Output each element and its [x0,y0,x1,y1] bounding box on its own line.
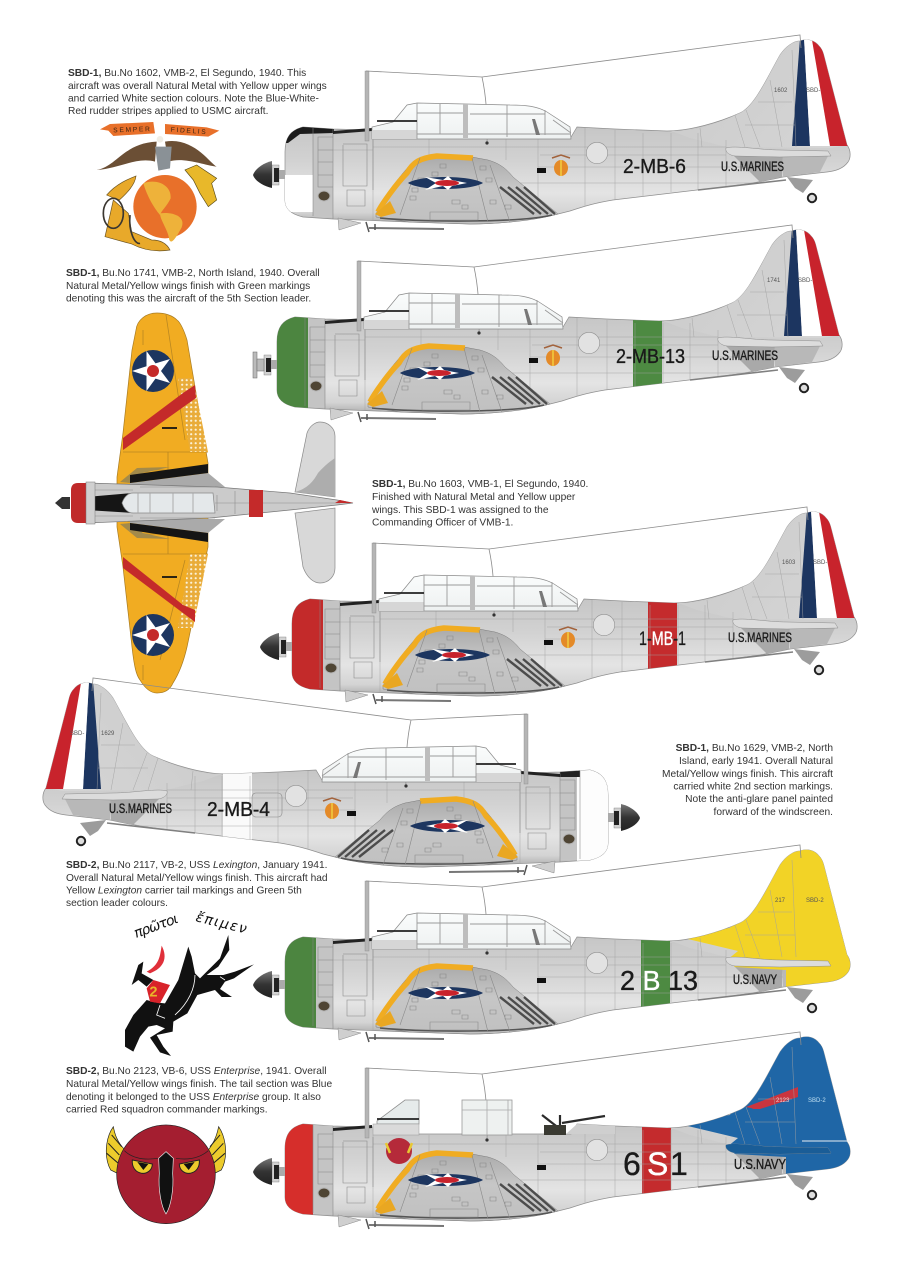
emblem: USMC eagle, globe and anchor: FIDELIS [171,127,206,136]
plan view aircraft: yellow wings [55,313,353,693]
pegasus silhouette: 2 [149,985,157,1001]
canopy [372,103,571,139]
fuselage and tail [285,40,850,224]
fin serials [70,731,115,737]
fin serials: SBD- [813,560,827,566]
text block: SBD-2 Bu.No 2123: denoting it belonged to the USS Enterprise group. It also [66,1092,321,1103]
fin serials [767,278,812,284]
U.S. MARINES: U.S.MARINES [721,159,784,174]
motto: πρῶτοι [132,911,181,942]
fuselage panel lines [95,487,340,518]
tailplane [295,422,335,583]
fin serials [782,560,827,566]
perforated flaps [178,378,208,628]
fuselage [87,483,353,523]
USMC decal [552,155,570,176]
text block: SBD-1 Bu.No 1603: wings. This SBD-1 was assigned to the [371,505,549,516]
code 2B13: 2 B 13 [620,965,698,996]
text block: SBD-1 Bu.No 1603: Finished with Natural Metal and Yellow upper [372,492,576,503]
airframe [253,225,842,422]
emblem: USMC eagle, globe and anchor [97,122,219,251]
airframe mirrored [43,678,640,875]
fin serials [775,898,824,904]
aircraft profile: 2-MB-6 [253,35,850,232]
yellow wings [106,1127,226,1175]
black walkways [130,464,208,542]
motto [132,909,249,942]
text block: SBD-2 Bu.No 2123: Natural Metal/Yellow wings finish. The tail section was Blue [66,1079,332,1090]
text block: SBD-1 Bu.No 1741: SBD-1, Bu.No 1741, VMB-2, North Island, 1940. Overall [66,268,320,279]
text block: SBD-1 Bu.No 1602: Red rudder stripes applied to USMC aircraft. [68,106,268,117]
wing dashes [162,428,177,577]
text block: SBD-2 Bu.No 2117: Yellow Lexington carrier tail markings and Green 5th [66,886,302,896]
US MARINES: U.S.MARINES [728,630,792,645]
US MARINES: U.S.MARINES [109,801,172,816]
motto: ἔπιμεν [194,909,249,938]
fin serials: SBD-2 [806,898,824,904]
pegasus silhouette [125,935,254,1056]
text block: SBD-1 Bu.No 1629: carried white 2nd section markings. [673,782,833,792]
red wing stripes [123,385,196,622]
fin serials [774,88,820,94]
code 6 S 1: S [647,1146,668,1182]
fin serials: 1602 [774,88,788,94]
code 1-MB-1: 1-MB-1 [639,629,686,650]
text block: SBD-1 Bu.No 1603: Commanding Officer of VMB-1. [372,518,513,528]
text block: SBD-1 Bu.No 1629: Note the anti-glare panel painted [685,794,833,805]
fin serials: SBD- [798,278,812,284]
code 6 S 1: 6 [623,1146,641,1182]
fin serials: 1603 [782,560,796,566]
text block: SBD-1 Bu.No 1629: SBD-1, Bu.No 1629, VMB-2, North [676,743,833,754]
canopy frames [138,493,193,513]
fuselage red band [249,490,263,517]
text block: SBD-1 Bu.No 1629: Island, early 1941. Overall Natural [679,756,833,767]
text block: SBD-1 Bu.No 1602: aircraft was overall Natural Metal with Yellow upper wings [68,81,327,92]
text block: SBD-2 Bu.No 2117: SBD-2, Bu.No 2117, VB-2, USS Lexington, January 1941. [66,860,327,871]
fin serials: SBD- [806,88,820,94]
text block: SBD-1 Bu.No 1741: denoting this was the aircraft of the 5th Section leader. [66,294,311,304]
wing feathers [107,1135,225,1163]
code 2-MB-6: 2-MB-6 [623,156,686,178]
code 2-MB-4: 2-MB-4 [207,799,270,821]
code 6 S 1: 1 [670,1146,688,1182]
white cowling patch and anti-glare [285,125,334,212]
upper wing roundel [132,350,174,392]
text block: SBD-2 Bu.No 2123: SBD-2, Bu.No 2123, VB-6, USS Enterprise, 1941. Overall [66,1066,326,1077]
aircraft profile: 2-MB-13 [253,225,842,422]
pupils [137,1162,195,1170]
lower wing roundel [132,614,174,656]
wing panel lines [123,315,208,680]
rudder stripes [792,38,848,146]
aircraft profile: 2B13 yellow tail [253,840,860,1042]
aircraft profile: 1-MB-1 [260,507,857,704]
airframe [253,1027,860,1229]
fin serials [776,1098,826,1104]
code 2-MB-13: 2-MB-13 [616,346,685,368]
canopy [122,493,215,513]
grey wing roots [130,473,225,533]
airframe [253,840,860,1042]
text block: SBD-1 Bu.No 1629: forward of the windscreen. [714,807,833,818]
eyes [132,1160,199,1173]
code panel outline [252,793,282,817]
red disc [117,1125,215,1224]
aircraft profile: 2-MB-4 (facing right) [43,678,640,875]
fin serials: SBD-2 [808,1098,826,1104]
engine ring and spinner [55,482,95,524]
anti-glare panel [86,493,133,513]
cowling [71,483,86,523]
bomb [159,1152,173,1214]
fin serials: 1629 [101,731,115,737]
tail tip [335,500,353,503]
US NAVY: U.S.NAVY [734,1156,786,1173]
fin serials: 2123 [776,1098,790,1104]
emblem: winged horse of VB-2 [125,909,254,1056]
aircraft profile: 6S1 blue tail [253,1027,860,1229]
text block: SBD-1 Bu.No 1741: Natural Metal/Yellow wings finish with Green markings [66,281,310,292]
text block: SBD-1 Bu.No 1602: SBD-1, Bu.No 1602, VMB-2, El Segundo, 1940. This [68,68,306,79]
wing [117,313,208,693]
squadron mini emblem [386,1138,412,1164]
text block: SBD-1 Bu.No 1629: Metal/Yellow wings finish. This aircraft [662,769,833,780]
emblem: red owl and bomb of VB-6 [106,1125,226,1224]
text block: SBD-1 Bu.No 1602: and carried White section colours. Note the Blue-White- [68,94,319,104]
brow line [124,1151,208,1159]
text block: SBD-2 Bu.No 2117: Overall Natural Metal/Yellow wings finish. This aircraft had [66,873,328,884]
wing, panels, mast and gear [272,35,831,232]
fin serials: SBD- [70,731,84,737]
US MARINES: U.S.MARINES [712,348,778,363]
emblem: USMC eagle, globe and anchor: SEMPER [113,126,150,134]
fin serials: 217 [775,898,786,904]
airframe [260,507,857,704]
text block: SBD-2 Bu.No 2123: carried Red squadron commander markings. [66,1104,268,1116]
text block: SBD-1 Bu.No 1603: SBD-1, Bu.No 1603, VMB-1, El Segundo, 1940. [372,479,588,490]
text block: SBD-2 Bu.No 2117: section leader colours. [66,898,168,909]
fin serials: 1741 [767,278,781,284]
US NAVY: U.S.NAVY [733,972,777,987]
wing root shadow [120,467,170,539]
spinner [253,161,272,188]
